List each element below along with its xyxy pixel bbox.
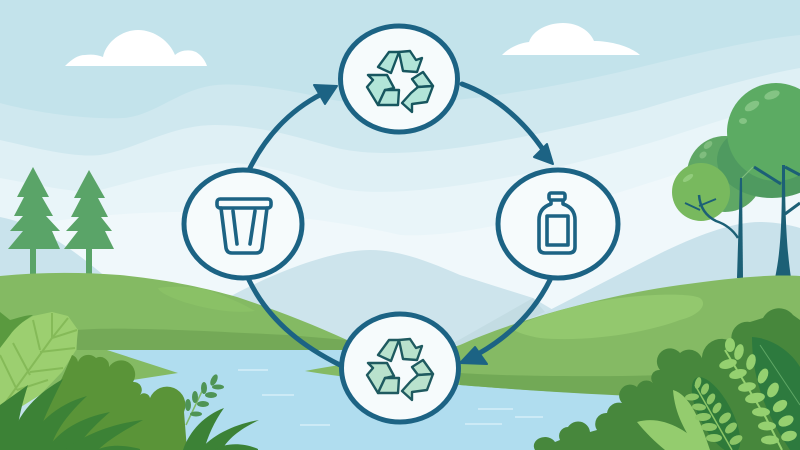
broadleaf trees (672, 83, 800, 278)
node: top recycling (340, 26, 458, 132)
arrow: bottom recycle to bin (248, 278, 340, 365)
icon: recycle top (367, 51, 433, 112)
water (90, 348, 710, 450)
large fern (718, 338, 798, 450)
left foliage (0, 312, 259, 450)
right hill (305, 275, 800, 410)
dark leaf corner (0, 312, 33, 348)
cloud right (502, 23, 640, 55)
dark leaf behind small fern (682, 370, 750, 450)
right foliage (534, 308, 800, 450)
small fern (685, 376, 744, 450)
arrow: bin to top recycle (250, 85, 337, 168)
pine trees (8, 167, 114, 277)
bush (534, 308, 800, 450)
distant mountains (0, 217, 800, 350)
bush (28, 355, 187, 450)
arrow: bottle to bottom recycle (460, 280, 550, 364)
icon: bottle (539, 193, 575, 253)
icon: recycle bottom (367, 339, 433, 400)
arrow: top recycle to bottle (462, 84, 553, 164)
node: trash bin (184, 170, 302, 278)
cloud left (65, 30, 207, 66)
grass blades (0, 379, 259, 450)
node: bottle (498, 170, 618, 278)
icon: trash bin (217, 199, 271, 253)
pale leaves (637, 420, 705, 450)
node: bottom recycling (342, 314, 458, 422)
cycle arrows (248, 84, 553, 365)
large pale leaf (0, 312, 78, 420)
left hill (0, 273, 347, 400)
small sprig (185, 373, 224, 416)
dark broad leaf (752, 337, 800, 450)
